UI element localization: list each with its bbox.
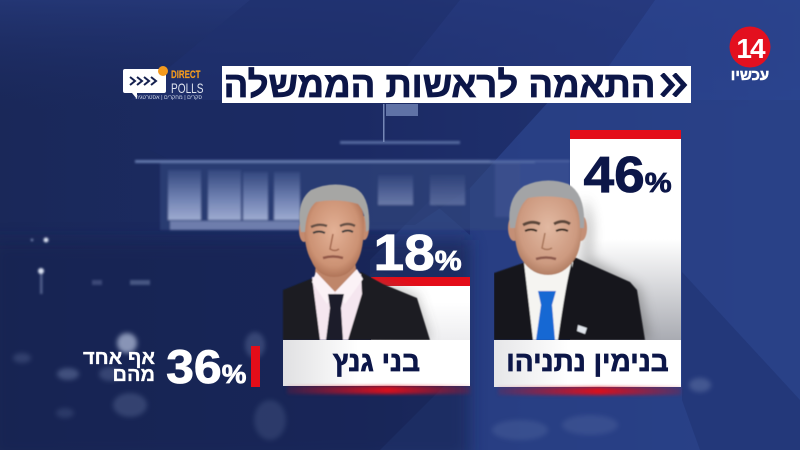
street lights and trees: [31, 238, 150, 294]
value 46%: 46%: [584, 146, 672, 203]
logo: channel 14 now: עכשיו: [731, 67, 769, 84]
result bar 46%: [570, 130, 681, 340]
title bar: [222, 66, 691, 103]
logo: Direct Polls: POLLS: [171, 80, 204, 96]
result bar 18%: [371, 277, 470, 340]
label text: אף אחד: [83, 347, 155, 369]
logo: channel 14 now: [730, 26, 770, 84]
logo: Direct Polls: [123, 66, 204, 101]
panel: Gantz: [282, 184, 471, 396]
logo: channel 14 now: 14: [736, 33, 764, 64]
value 18%: 18%: [374, 224, 462, 281]
icon: double chevron: [660, 73, 688, 97]
logo: Direct Polls: DIRECT: [171, 69, 200, 81]
name plate: [283, 340, 470, 386]
logo: Direct Polls: סקרים | מחקרים | אסטרטגיה: [135, 95, 202, 101]
value 36%: 36%: [166, 340, 246, 393]
photo: Netanyahu portrait: [494, 180, 654, 340]
label text: [83, 347, 155, 386]
label text: מהם: [113, 364, 155, 386]
callout: neither of them 36%: [83, 340, 260, 393]
name text: בני גנץ: [333, 346, 420, 377]
name plate: [494, 340, 681, 387]
red glow under plate: [498, 387, 681, 395]
name text: בנימין נתניהו: [506, 346, 669, 377]
photo: Gantz portrait: [282, 184, 434, 340]
red glow under plate: [287, 386, 470, 394]
red marker: [251, 346, 260, 387]
panel: Netanyahu: [494, 130, 682, 398]
